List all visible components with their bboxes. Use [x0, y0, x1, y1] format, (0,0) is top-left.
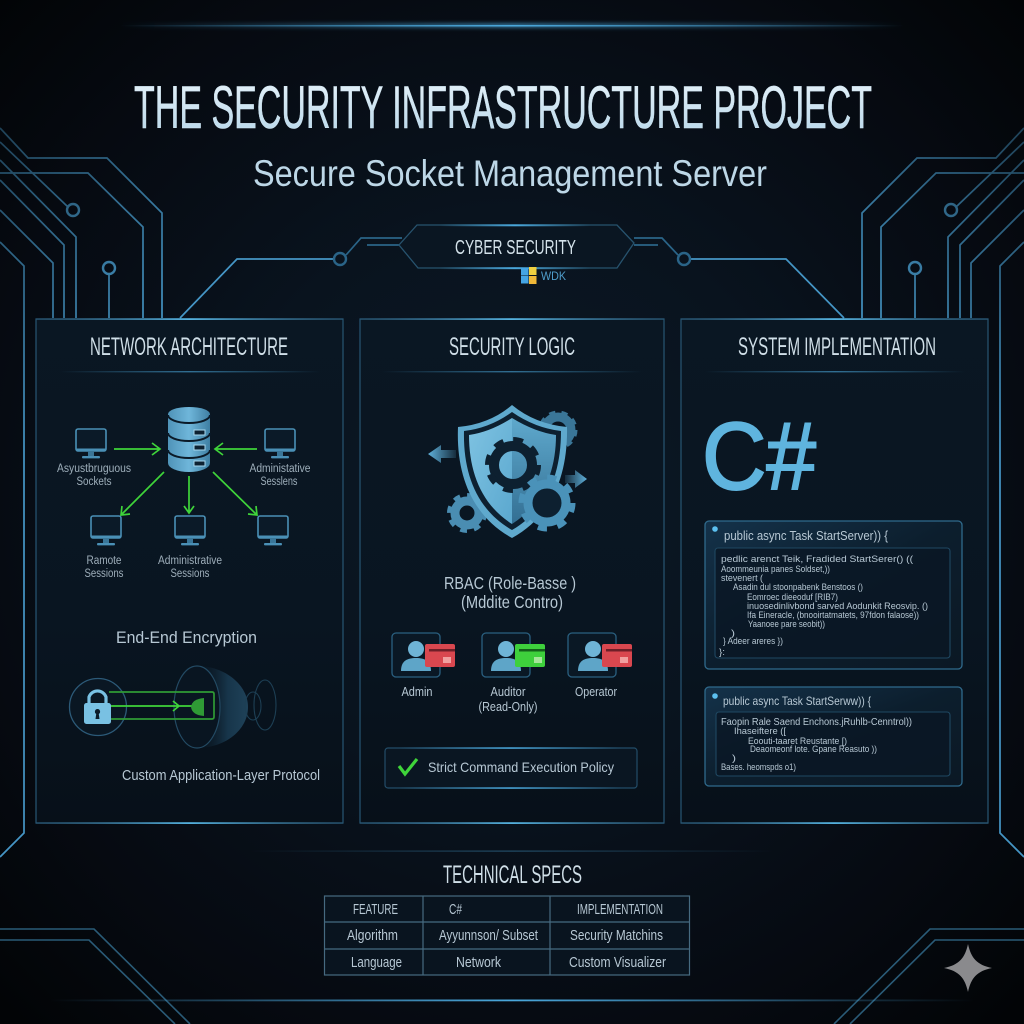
icon: back gear [541, 413, 575, 447]
code window one: Eomroec dieeoduf [RIB7) [747, 592, 838, 603]
row: language: Network [456, 955, 502, 971]
callout: command policy: Strict Command Execution Policy [428, 759, 614, 775]
role: operator [568, 633, 632, 699]
code window one: }: [719, 647, 725, 658]
code window two [705, 687, 962, 786]
labels: sessions: Ramote [86, 555, 122, 567]
code window one: Aoommeunia panes Soldset,)) [721, 564, 830, 575]
code window one: Ifa Eineracle, (bnooirtatmatets, 97fdon falaose)) [747, 610, 919, 621]
header row: C# [449, 901, 462, 918]
bottom left corner traces [0, 929, 190, 1024]
divider glow above specs [250, 850, 774, 852]
code window one: public async Task StartServer)) { [724, 529, 888, 543]
bottom right corner traces [834, 929, 1024, 1024]
role: auditor: (Read-Only) [478, 700, 538, 714]
row: algorithm [347, 928, 663, 944]
heading: SECURITY LOGIC [449, 333, 575, 361]
panel: system implementation [681, 318, 988, 824]
code window one: inuosedinlivbond sarved Aodunkit Reosvip. () [747, 601, 928, 612]
code window two: Faopin Rale Saend Enchons.jRuhlb-Cenntrol)) [721, 716, 912, 728]
row: algorithm: Ayyunnson/ Subset [439, 928, 538, 944]
badge: cyber security [399, 224, 634, 269]
panel: network architecture [36, 318, 343, 824]
role: admin: Admin [402, 685, 433, 699]
wdk logo [521, 267, 566, 284]
row: algorithm: Security Matchins [570, 928, 663, 944]
arrows: connections [114, 443, 257, 515]
icon: central gear [488, 440, 538, 490]
code window two: Eoouti-taaret Reustante [) [748, 736, 847, 747]
heading: NETWORK ARCHITECTURE [90, 333, 288, 361]
header row: FEATURE [353, 901, 398, 918]
heading: technical specs: TECHNICAL SPECS [443, 861, 582, 889]
badge: cyber security: CYBER SECURITY [455, 237, 576, 259]
code window two: Ihaseiftere ([ [734, 726, 786, 737]
code window two: Bases. heomspds o1) [721, 762, 796, 773]
row: language [351, 955, 666, 971]
role: auditor [478, 633, 545, 714]
left circuit traces [0, 128, 162, 857]
labels: sessions: Sockets [76, 476, 112, 488]
icon: left arrow [428, 445, 456, 463]
code window one: stevenert ( [721, 573, 764, 584]
row: language: Custom Visualizer [569, 955, 666, 971]
code window one: pedlic arenct Teik, Fradided StartSerer() (( [721, 554, 914, 565]
icon: lower-right gear [522, 478, 572, 528]
code window one: Yaanoee pare seobit)) [748, 619, 825, 630]
code window two: Deaomeonf lote. Gpane Reasuto )) [750, 744, 877, 755]
label: protocol: Custom Application-Layer Protocol [122, 768, 320, 784]
heading underline [60, 371, 320, 372]
heading: encryption: End-End Encryption [116, 628, 257, 647]
panel: security logic [360, 318, 664, 824]
code window one: } Adeer areres }) [723, 636, 783, 647]
icon: right arrow [565, 470, 587, 488]
table: technical specs [324, 896, 690, 975]
diagram: encryption tunnel [70, 666, 276, 748]
icon: monitors [76, 429, 295, 545]
connectors to badge [180, 238, 844, 318]
icon: lower-left gear [450, 496, 484, 530]
bottom glow line [50, 1000, 974, 1001]
row: algorithm: Algorithm [347, 928, 398, 944]
heading underline [382, 371, 642, 372]
subtitle: Secure Socket Management Server [253, 153, 767, 194]
code window two: public async Task StartSerww)) { [723, 694, 871, 708]
icon: shield body [458, 405, 567, 538]
labels: sessions: Sessions [170, 568, 210, 580]
row: language: Language [351, 955, 402, 971]
labels: sessions: Sessions [84, 568, 124, 580]
text: rbac: RBAC (Role-Basse ) [444, 573, 576, 593]
right circuit traces [862, 128, 1024, 857]
icon: shield with gears [428, 405, 587, 538]
wdk logo: WDK [541, 269, 566, 283]
header row [353, 901, 663, 918]
icon: sparkle watermark [944, 944, 992, 992]
role: auditor: Auditor [490, 685, 526, 699]
labels: sessions [57, 463, 310, 580]
c sharp logo: C# [702, 403, 816, 510]
callout: command policy [385, 747, 637, 789]
labels: sessions: Administrative [158, 555, 222, 567]
icon: database [168, 407, 210, 472]
code window one: ) [731, 628, 735, 639]
top glow line [120, 24, 904, 27]
code window one: Asadin dul stoonpabenk Benstoos () [733, 582, 863, 593]
role: operator: Operator [575, 685, 617, 699]
labels: sessions: Administative [250, 463, 310, 475]
header row: IMPLEMENTATION [577, 901, 663, 918]
labels: sessions: Sesslens [260, 476, 298, 488]
text: rbac [444, 573, 576, 612]
code window two: ) [732, 753, 736, 764]
role: admin [392, 633, 455, 699]
code window one [705, 521, 962, 669]
text: rbac: (Mddite Contro) [461, 592, 563, 612]
labels: sessions: Asyustbruguous [57, 463, 131, 475]
heading underline [705, 371, 965, 372]
